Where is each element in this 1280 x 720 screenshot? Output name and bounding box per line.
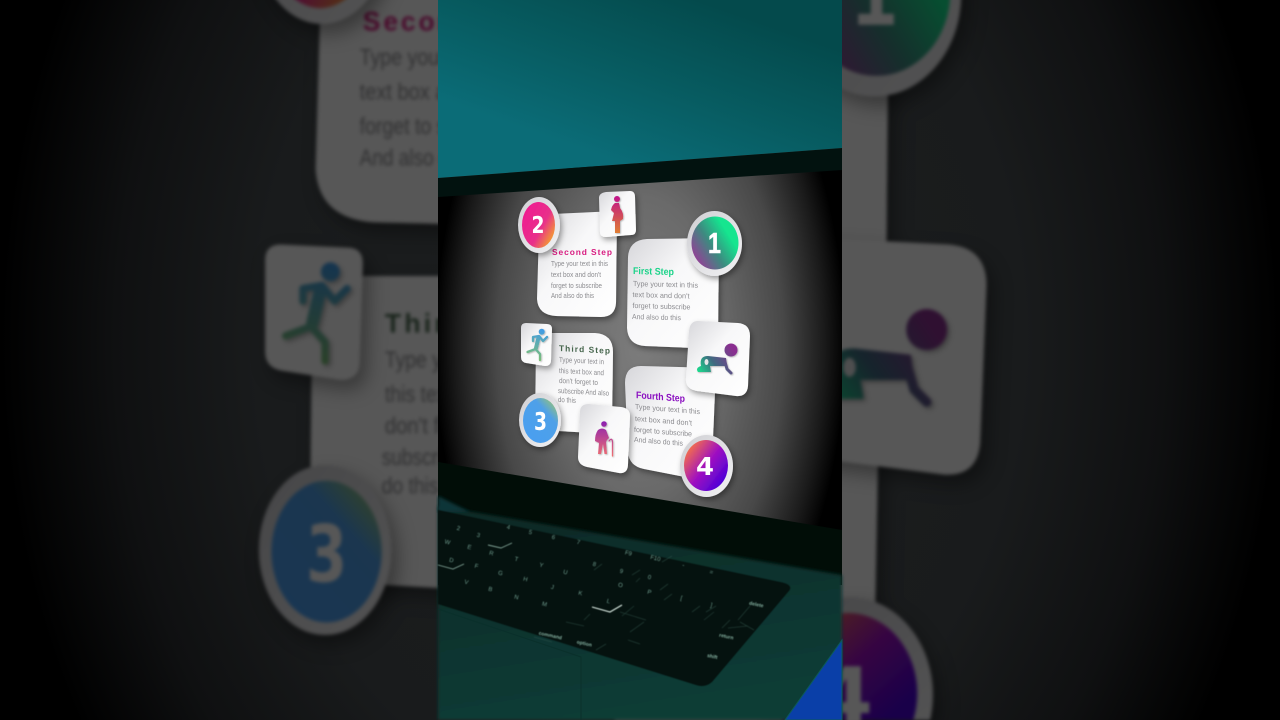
- key legends: B: [488, 587, 493, 593]
- text: third step heading and body: Type your text in: [559, 355, 604, 366]
- text: second step body: Type your text in this: [551, 259, 608, 268]
- key legends: F9: [624, 550, 633, 558]
- text: third step heading and body: do this: [558, 395, 576, 405]
- key legends: shift: [706, 653, 718, 661]
- panel: second step copy: Second Step: [363, 6, 552, 36]
- key legends: Y: [539, 563, 544, 569]
- key legends: U: [562, 570, 568, 576]
- badge 4 copy: [766, 597, 933, 720]
- blue surface at the corner: [785, 640, 842, 720]
- icon tile: crawling baby: [686, 321, 750, 396]
- key legends: command: [538, 631, 562, 641]
- panel: second step copy: text box and don't: [360, 79, 518, 105]
- badge 2: [518, 197, 560, 253]
- text: fourth step heading and body: [634, 390, 700, 449]
- key legends: 4: [506, 525, 511, 532]
- key legends: L: [606, 599, 611, 606]
- icon tile: pregnant woman: [599, 191, 636, 237]
- bright key edge left: [438, 543, 512, 569]
- badge 4: 4: [696, 452, 714, 481]
- panel: second step copy: Type your text in this: [360, 44, 539, 70]
- badge 1: [687, 211, 742, 276]
- text: fourth step heading and body: Type your text in this: [635, 402, 700, 416]
- badge 3: [519, 393, 561, 447]
- key legends: -: [682, 563, 685, 569]
- badge 3: 3: [534, 407, 547, 436]
- text: first step heading and body: text box and don't: [632, 290, 689, 301]
- key legends: P: [647, 590, 652, 596]
- heading: second step: Second Step: [552, 247, 612, 257]
- text: third step heading and body: don't forget to: [559, 376, 598, 387]
- key legends: M: [541, 602, 547, 609]
- icon tile: crawling baby copy: [785, 238, 987, 475]
- icon tile: elderly person with cane: [578, 404, 630, 473]
- panel: fourth step copy: [593, 380, 879, 720]
- key legends: return: [719, 633, 734, 641]
- text: third step heading and body: Third Step: [559, 343, 610, 356]
- key legends: [: [680, 596, 683, 602]
- lid bezel: [438, 148, 842, 198]
- key legends: 7: [576, 540, 581, 547]
- panel: third step copy: [309, 276, 555, 594]
- badge 1 copy: [788, 0, 961, 96]
- text: second step body: And also do this: [551, 291, 594, 300]
- key legends: 3: [476, 533, 481, 540]
- key legends: W: [444, 539, 451, 547]
- text: second step body: forget to subscribe: [551, 281, 602, 290]
- key edge highlights: [534, 556, 754, 650]
- laptop deck: [438, 506, 842, 720]
- key legends: H: [522, 577, 528, 583]
- text: fourth step heading and body: text box and don't: [635, 414, 692, 427]
- key legends: 0: [647, 575, 652, 582]
- panel: first step copy: [599, 0, 889, 326]
- panel: third step copy: Third Step: [385, 309, 546, 339]
- key legends: [444, 525, 764, 661]
- icon tile: runner copy: [265, 244, 363, 380]
- infographic on the laptop screen: [518, 191, 750, 497]
- key legends: 2: [456, 526, 461, 533]
- badge 1: 1: [708, 228, 721, 260]
- key legends: 9: [619, 569, 624, 576]
- hinge and dark area below the screen: [438, 455, 842, 585]
- laptop lid: teal back panel: [438, 0, 842, 178]
- text: second step body: text box and don't: [551, 270, 601, 279]
- panel: second step: [537, 211, 617, 317]
- panel: second step copy: forget to subscribe: [360, 113, 520, 139]
- panel: third step copy: this text box and: [385, 381, 527, 407]
- key legends: D: [448, 558, 455, 565]
- key legends: T: [514, 557, 519, 563]
- bright key edge: [592, 605, 622, 612]
- trackpad outline: [438, 609, 581, 720]
- text: second step body: [551, 259, 608, 300]
- key legends: O: [617, 583, 624, 590]
- key legends: F10: [649, 555, 662, 563]
- key legends: =: [709, 570, 714, 576]
- text: first step heading and body: Type your text in this: [633, 279, 698, 290]
- key legends: E: [467, 545, 472, 551]
- text: first step heading and body: And also do this: [632, 312, 681, 322]
- panel: third step: [535, 333, 613, 434]
- badge 4: [680, 435, 733, 497]
- deck highlight: [438, 496, 470, 512]
- panel: third step copy: do this: [382, 472, 438, 498]
- key legends: 8: [592, 562, 597, 569]
- panel: second step copy: And also do this: [360, 145, 495, 171]
- key legends: F: [474, 564, 479, 570]
- text: third step heading and body: this text box and: [559, 366, 604, 377]
- key legends: 6: [551, 535, 556, 542]
- key legends: G: [497, 571, 504, 578]
- key legends: N: [513, 595, 519, 601]
- text: fourth step heading and body: Fourth Step: [636, 390, 685, 405]
- text: first step heading and body: First Step: [633, 266, 674, 278]
- text: third step heading and body: [558, 343, 610, 407]
- laptop screen: [438, 170, 842, 530]
- text: fourth step heading and body: forget to subscribe: [634, 425, 692, 438]
- key legends: J: [550, 585, 554, 591]
- panel: fourth step: [625, 366, 716, 478]
- panel: first step: [627, 238, 719, 349]
- key legends: R: [488, 551, 495, 558]
- key legends: 5: [528, 530, 533, 537]
- text: first step heading and body: forget to subscribe: [632, 301, 690, 312]
- panel: third step copy: Type your text in: [385, 346, 527, 372]
- panel: third step copy: subscribe And also: [382, 444, 542, 470]
- badge 2 copy: [256, 0, 388, 24]
- panel: second step copy: [316, 0, 568, 226]
- key legends: option: [576, 639, 592, 649]
- key legends: V: [464, 580, 469, 586]
- enlarged blurred copy of the infographic behind the video: [256, 0, 987, 720]
- key legends: K: [578, 591, 583, 597]
- keyboard: [438, 510, 790, 686]
- key legends: delete: [749, 601, 764, 610]
- text: fourth step heading and body: And also do this: [634, 435, 683, 448]
- text: first step heading and body: [632, 266, 698, 323]
- icon tile: runner: [521, 323, 552, 366]
- panel: third step copy: don't forget to: [385, 412, 508, 438]
- badge 2: 2: [532, 213, 544, 239]
- text: third step heading and body: subscribe And also: [558, 386, 609, 398]
- badge 3 copy: 3: [306, 508, 347, 600]
- badge 3 copy: [259, 465, 391, 635]
- key legends: ]: [710, 603, 713, 609]
